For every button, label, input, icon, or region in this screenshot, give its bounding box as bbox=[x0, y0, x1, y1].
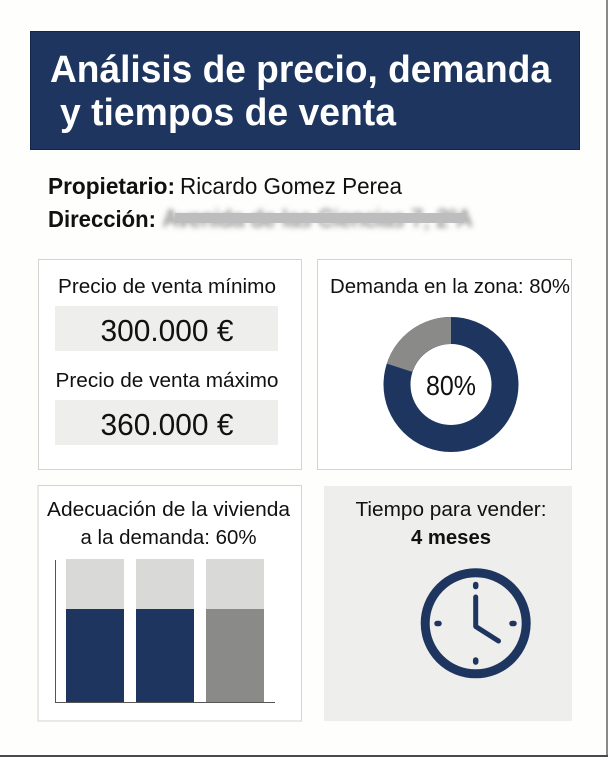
address line: Dirección: bbox=[48, 206, 156, 232]
panel: suitability: a la demanda: 60% bbox=[80, 526, 256, 549]
bar chart bbox=[56, 559, 275, 702]
owner line: Ricardo Gomez Perea bbox=[180, 173, 402, 199]
title banner: Análisis de precio, demanda bbox=[50, 49, 552, 91]
panel: price range: 360.000 € bbox=[100, 407, 234, 442]
icon: clock bbox=[425, 573, 526, 674]
title banner: y tiempos de venta bbox=[60, 92, 397, 134]
panel: suitability: Adecuación de la vivienda bbox=[47, 498, 291, 521]
owner line bbox=[48, 173, 402, 199]
address line: Avenida de las Ciencias 7, 2ºA bbox=[163, 205, 472, 233]
panel: suitability bbox=[38, 486, 302, 721]
panel: time to sell bbox=[324, 486, 572, 721]
panel: price range bbox=[38, 260, 302, 470]
panel: time to sell: Tiempo para vender: bbox=[356, 498, 546, 521]
panel: time to sell: 4 meses bbox=[411, 527, 491, 549]
address line bbox=[48, 205, 472, 233]
panel: price range: 300.000 € bbox=[100, 313, 234, 348]
panel: price range: Precio de venta mínimo bbox=[58, 275, 276, 298]
panel: zone demand: Demanda en la zona: 80% bbox=[330, 275, 570, 298]
title banner bbox=[30, 31, 580, 150]
panel: price range: Precio de venta máximo bbox=[56, 369, 278, 392]
donut chart: 80% bbox=[426, 370, 476, 401]
owner line: Propietario: bbox=[48, 173, 175, 199]
panel: zone demand bbox=[318, 260, 572, 470]
donut chart bbox=[387, 317, 505, 438]
